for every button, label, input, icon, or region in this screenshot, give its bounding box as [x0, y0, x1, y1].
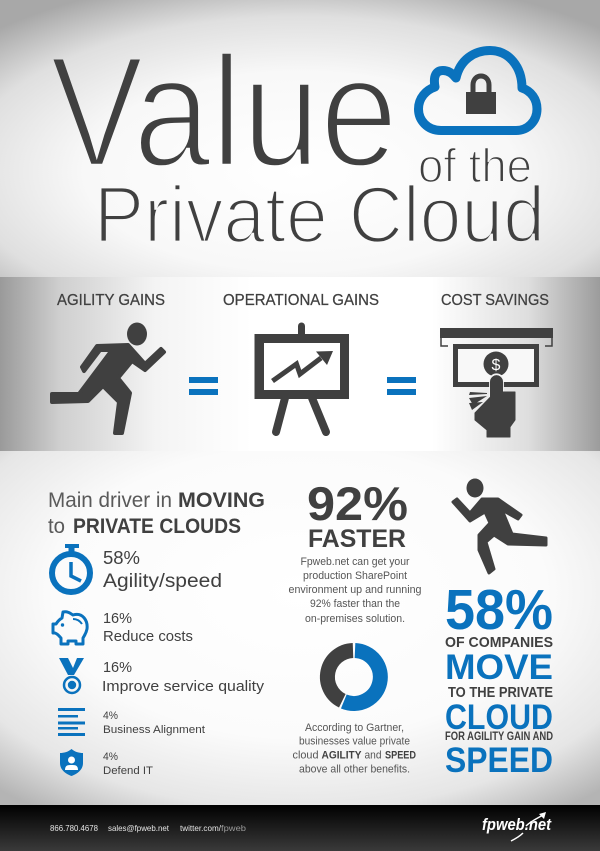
stat: reduce costs: Reduce costs: [103, 628, 193, 645]
heading: main driver: Main driver in: [48, 489, 172, 512]
text block: gartner note: and: [364, 750, 382, 762]
logo: fpweb.net: [482, 812, 552, 841]
stat: reduce costs: 16%: [103, 610, 132, 627]
footer contact details: 866.780.4678: [50, 823, 98, 833]
icon: cloud with padlock: [418, 50, 537, 130]
stat: 92% faster: FASTER: [308, 525, 406, 553]
stat: 92% faster: [307, 477, 408, 553]
text block: 92% explanation: Fpweb.net can get your: [300, 556, 410, 568]
icon: running figure small: [453, 478, 546, 573]
stat: improve service quality: Improve service quality: [102, 678, 265, 695]
icon: piggy bank: [53, 612, 87, 644]
stat: agility speed: [103, 547, 222, 592]
panel: gains band background: [0, 277, 600, 451]
icon: medal: [59, 658, 84, 693]
callout: 58% of companies move: 58%: [445, 578, 553, 642]
footer contact details: [50, 823, 246, 833]
text block: 92% explanation: 92% faster than the: [310, 598, 400, 610]
text block: gartner note: SPEED: [385, 750, 416, 762]
icon: equals sign: [189, 377, 218, 395]
heading: main driver: PRIVATE CLOUDS: [73, 515, 241, 538]
icon: text lines: [58, 708, 85, 736]
text block: 92% explanation: environment up and running: [288, 584, 422, 596]
footer contact details: fpweb: [221, 823, 246, 833]
panel: statistics background: [0, 451, 600, 805]
callout: 58% of companies move: FOR AGILITY GAIN AND: [445, 731, 553, 743]
heading: operational gains: OPERATIONAL GAINS: [223, 292, 379, 309]
icon: hand inserting coin into slot: [440, 328, 553, 437]
stat: reduce costs: [103, 610, 193, 645]
icon: shield: [60, 749, 83, 776]
stat: agility speed: 58%: [103, 547, 140, 568]
text block: gartner note: businesses value private: [299, 736, 410, 748]
callout: 58% of companies move: CLOUD: [445, 698, 553, 737]
text block: 92% explanation: on-premises solution.: [305, 613, 405, 625]
chart: donut: [327, 650, 380, 703]
icon: hand inserting coin into slot: $: [492, 357, 501, 374]
icon: equals sign: [387, 377, 416, 395]
title: of the: [418, 139, 532, 192]
stat: defend it: Defend IT: [103, 765, 153, 777]
icon: running figure: [52, 322, 164, 433]
logo: fpweb.net: fpweb.net: [482, 815, 552, 834]
stat: improve service quality: [102, 659, 265, 695]
callout: 58% of companies move: MOVE: [445, 648, 553, 687]
text block: gartner note: According to Gartner,: [305, 722, 404, 734]
stat: business alignment: 4%: [103, 710, 118, 722]
heading: main driver: MOVING: [178, 489, 265, 512]
callout: 58% of companies move: SPEED: [445, 741, 553, 780]
text block: gartner note: [292, 722, 416, 776]
stat: agility speed: Agility/speed: [103, 571, 222, 592]
callout: 58% of companies move: TO THE PRIVATE: [448, 685, 553, 701]
heading: main driver: to: [48, 515, 65, 538]
text block: 92% explanation: production SharePoint: [303, 570, 407, 582]
title: [50, 24, 545, 259]
stat: defend it: 4%: [103, 751, 118, 763]
stat: business alignment: [103, 710, 205, 736]
heading: cost savings: COST SAVINGS: [441, 292, 549, 309]
text block: 92% explanation: [288, 556, 422, 625]
panel: header background: [0, 0, 600, 277]
callout: 58% of companies move: OF COMPANIES: [445, 634, 553, 651]
stat: improve service quality: 16%: [103, 659, 132, 676]
panel: footer background: [0, 805, 600, 851]
heading: main driver: [48, 489, 265, 538]
text block: gartner note: AGILITY: [322, 750, 362, 762]
footer contact details: sales@fpweb.net: [108, 823, 170, 833]
title: Value: [50, 24, 398, 200]
callout: 58% of companies move: [445, 578, 553, 780]
icon: presentation board with rising chart: [254, 326, 349, 432]
text block: gartner note: cloud: [292, 750, 318, 762]
stat: 92% faster: 92%: [307, 477, 408, 530]
heading: agility gains: AGILITY GAINS: [57, 292, 165, 309]
stat: defend it: [103, 751, 153, 777]
title: Private Cloud: [94, 170, 545, 259]
footer contact details: twitter.com/: [180, 823, 222, 833]
text block: gartner note: above all other benefits.: [299, 764, 410, 776]
stat: business alignment: Business Alignment: [103, 724, 205, 736]
icon: stopwatch: [52, 544, 90, 592]
